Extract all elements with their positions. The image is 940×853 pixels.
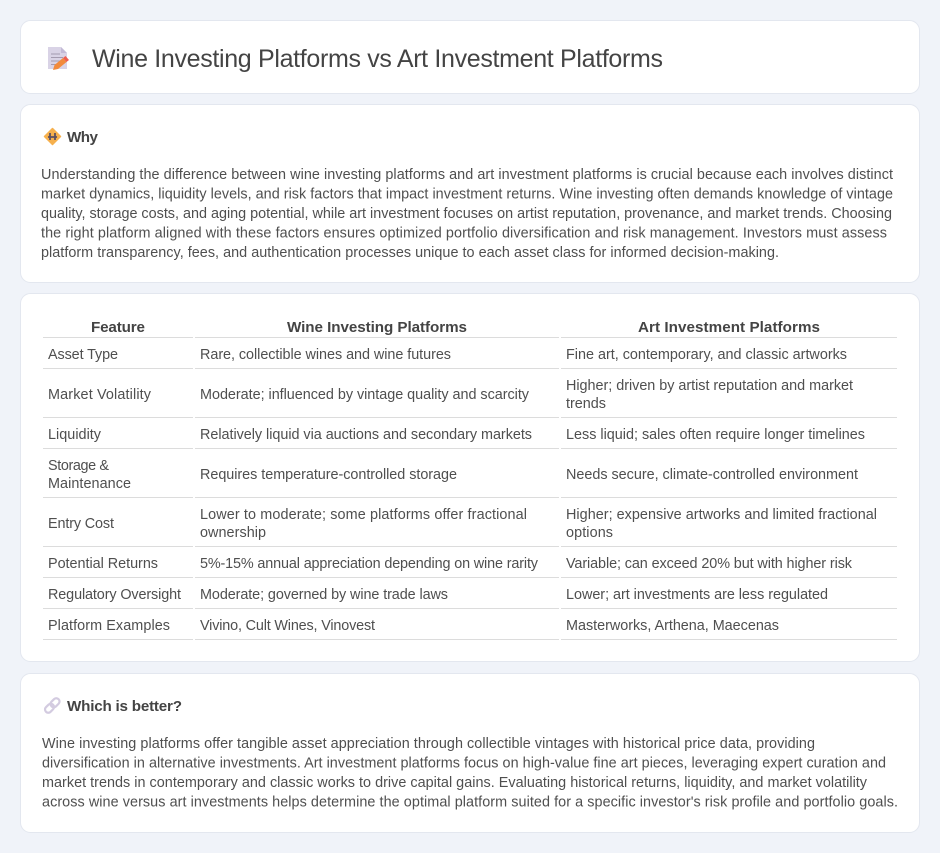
row: liquidity — [48, 427, 865, 443]
icon: chain link — [44, 697, 61, 714]
text block: why paragraph: quality, storage costs, and aging potential, while art investment focuses on artist reputation, provenance, and market trends. Choosing — [41, 206, 892, 222]
panel: why — [20, 104, 920, 282]
text block: which is better paragraph: across wine versus art investments helps determine the optimal platform suited for a specific investor's risk profile and portfolio goals. — [42, 794, 898, 810]
icon: document with pencil — [48, 47, 69, 70]
row: platform examples: Platform Examples — [48, 618, 170, 634]
row: potential returns — [48, 556, 853, 572]
row: entry cost: ownership — [200, 525, 266, 541]
table rules — [43, 338, 897, 640]
text block: why paragraph: platform transparency, fees, and authentication processes unique to each asset class for informed decision-making. — [41, 245, 779, 261]
text block: why paragraph: market dynamics, liquidity levels, and risk factors that impact investment returns. Wine investing often demands knowledge of vintage — [41, 186, 893, 202]
text block: why paragraph: the right platform aligned with these factors ensures optimized portfolio diversification and risk management. Investors must assess — [41, 226, 887, 242]
text block: why paragraph: Understanding the difference between wine investing platforms and art investment platforms is crucial because each involves distinct — [41, 167, 893, 183]
row: asset type: Asset Type — [48, 347, 118, 363]
row: storage and maintenance: Maintenance — [48, 476, 131, 492]
row: liquidity: Less liquid; sales often require longer timelines — [566, 427, 865, 443]
row: platform examples: Masterworks, Arthena, Maecenas — [566, 618, 779, 634]
row: market volatility: Higher; driven by artist reputation and market — [566, 378, 853, 394]
table header row: Feature — [91, 319, 145, 336]
row: market volatility — [48, 378, 853, 412]
row: storage and maintenance: Needs secure, climate-controlled environment — [566, 467, 858, 483]
row: market volatility: Market Volatility — [48, 387, 152, 403]
icon: warning diamond — [44, 128, 60, 144]
row: regulatory oversight — [48, 587, 828, 603]
panel: title header — [20, 20, 920, 94]
row: liquidity: Relatively liquid via auctions and secondary markets — [200, 427, 532, 443]
row: platform examples: Vivino, Cult Wines, Vinovest — [200, 618, 375, 634]
text block: which is better paragraph: diversification in alternative investments. Art investment platforms focus on high-value fine art pieces, leveraging expert curation and — [42, 756, 886, 772]
row: platform examples — [48, 618, 779, 634]
row: asset type: Fine art, contemporary, and classic artworks — [566, 347, 847, 363]
heading: why: Why — [67, 129, 99, 146]
row: storage and maintenance — [48, 458, 858, 492]
panel: which is better — [20, 674, 920, 832]
title: Wine Investing Platforms vs Art Investment Platforms — [92, 45, 663, 73]
table header row: Art Investment Platforms — [638, 319, 820, 336]
table header row — [91, 319, 820, 336]
text block: which is better paragraph: Wine investing platforms offer tangible asset appreciation through collectible vintages with historical price data, providing — [42, 736, 815, 752]
row: regulatory oversight: Lower; art investments are less regulated — [566, 587, 828, 603]
row: entry cost: Lower to moderate; some platforms offer fractional — [200, 507, 527, 523]
row: regulatory oversight: Moderate; governed by wine trade laws — [200, 587, 448, 603]
row: potential returns: Potential Returns — [48, 556, 158, 572]
row: market volatility: trends — [566, 396, 606, 412]
row: potential returns: Variable; can exceed 20% but with higher risk — [566, 556, 853, 572]
row: entry cost — [48, 507, 877, 541]
heading: which is better: Which is better? — [67, 698, 182, 715]
text block: why paragraph — [41, 167, 893, 261]
row: regulatory oversight: Regulatory Oversight — [48, 587, 181, 603]
row: market volatility: Moderate; influenced by vintage quality and scarcity — [200, 387, 530, 403]
row: entry cost: Higher; expensive artworks and limited fractional — [566, 507, 877, 523]
row: storage and maintenance: Storage & — [48, 458, 109, 474]
panel: comparison table — [20, 294, 920, 662]
row: potential returns: 5%-15% annual appreciation depending on wine rarity — [200, 556, 539, 572]
text block: which is better paragraph — [42, 736, 898, 810]
text block: which is better paragraph: market trends in contemporary and classic works to drive capital gains. Evaluating historical returns, liquidity, and market volatility — [42, 775, 868, 791]
row: entry cost: Entry Cost — [48, 516, 114, 532]
table header row: Wine Investing Platforms — [287, 319, 467, 336]
row: entry cost: options — [566, 525, 613, 541]
row: asset type: Rare, collectible wines and wine futures — [200, 347, 451, 363]
row: storage and maintenance: Requires temperature-controlled storage — [200, 467, 457, 483]
row: liquidity: Liquidity — [48, 427, 102, 443]
row: asset type — [48, 347, 847, 363]
